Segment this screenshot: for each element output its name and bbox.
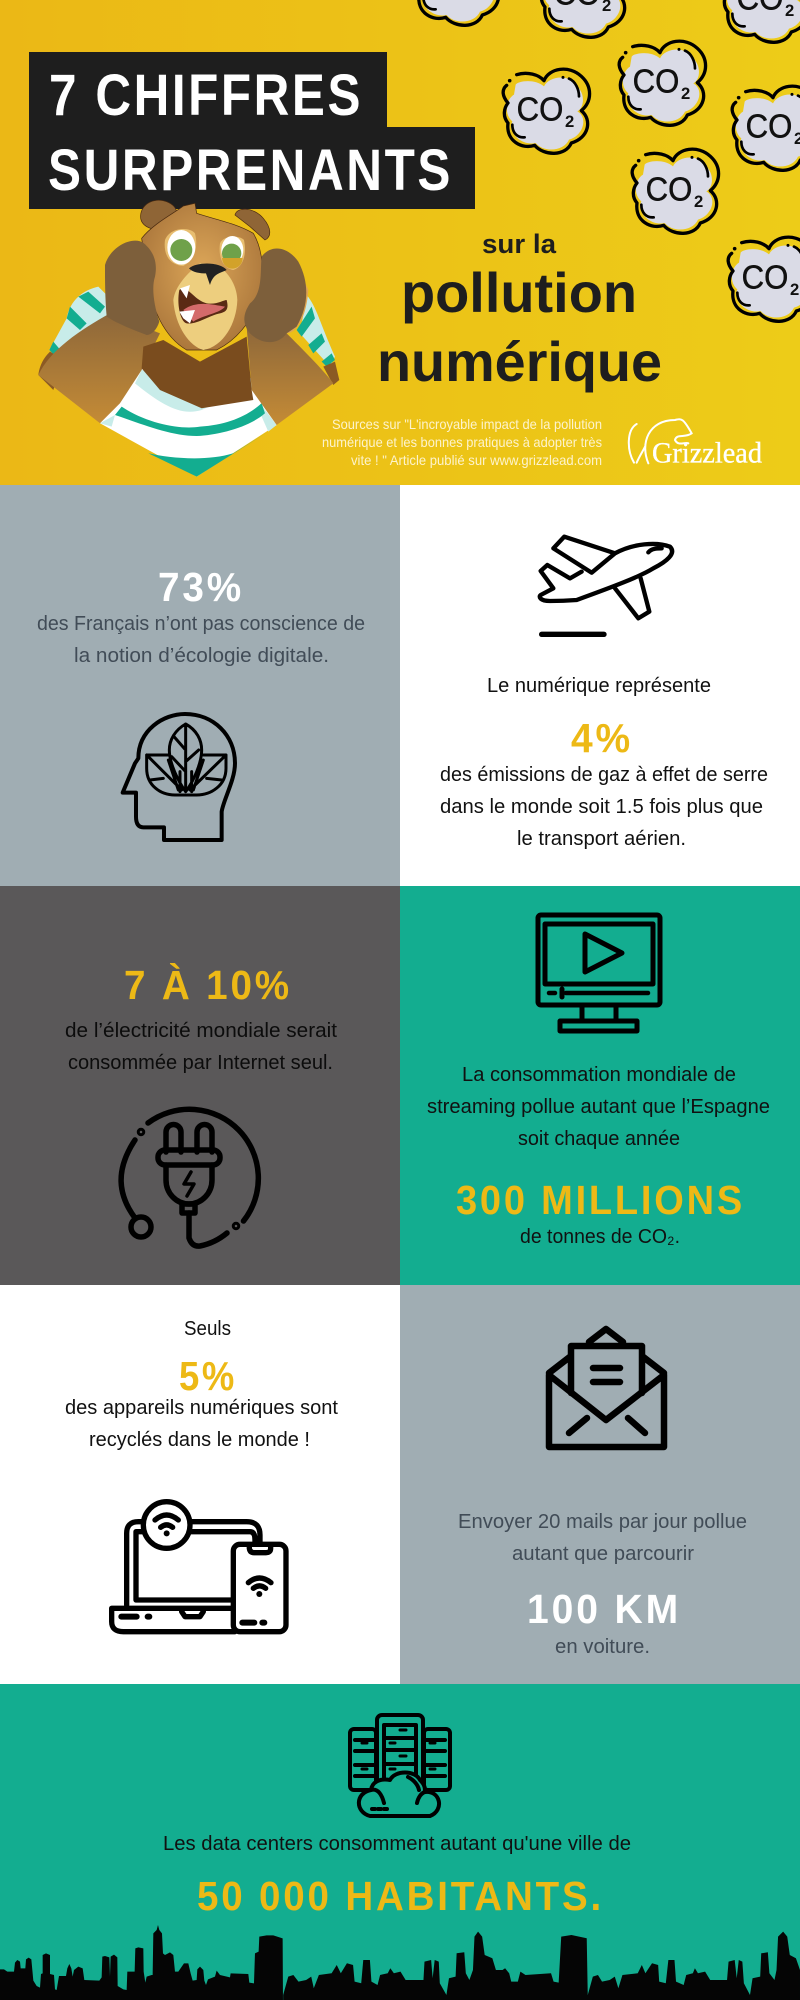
subtitle: numérique (377, 330, 662, 393)
text: devices description (65, 1397, 338, 1451)
stat: 4%: 4% (571, 715, 633, 761)
text: email description: Envoyer 20 mails par jour pollue (458, 1511, 747, 1533)
title box (29, 52, 475, 209)
text: 4% description (440, 764, 768, 850)
panel: data centers (0, 1684, 800, 2000)
icon: CO2 cloud 8: 2 (790, 280, 799, 299)
panel: streaming (400, 886, 800, 1285)
icon: CO2 cloud 4: 2 (565, 112, 574, 131)
panel: 73% (0, 485, 400, 886)
icon: laptop and phone (112, 1502, 286, 1632)
text: 73% description: la notion d’écologie digitale. (74, 645, 329, 667)
icon: servers and cloud (350, 1715, 450, 1816)
title box: 7 CHIFFRES (49, 63, 363, 128)
stat: 300 millions: 300 MILLIONS (456, 1177, 745, 1223)
icon: CO2 cloud 7 (632, 149, 719, 233)
text: 4% description: dans le monde soit 1.5 fois plus que (440, 796, 763, 818)
sources text (322, 416, 602, 468)
icon: CO2 cloud 8: CO (742, 259, 788, 296)
icon: CO2 cloud 8 (728, 237, 800, 321)
stat: 73%: 73% (158, 564, 244, 610)
sources text: vite ! " Article publié sur www.grizzlead.com (351, 452, 602, 468)
icon: CO2 cloud 5 (619, 41, 706, 125)
sources text: numérique et les bonnes pratiques à adopter très (322, 434, 602, 450)
icon: electric plug (121, 1109, 258, 1246)
text: email description (458, 1511, 747, 1565)
skyline silhouette (0, 1925, 800, 2000)
text: 73% description: des Français n’ont pas conscience de (37, 613, 365, 635)
text: streaming description: streaming pollue autant que l’Espagne (427, 1096, 770, 1118)
stat: 100 km: 100 KM (527, 1586, 681, 1632)
icon: CO2 cloud 4 (503, 69, 590, 153)
text: seuls: Seuls (184, 1318, 231, 1340)
subtitle: sur la (482, 229, 557, 259)
icon: CO2 cloud 4: CO (517, 91, 563, 128)
text: intro: Le numérique représente (487, 675, 711, 697)
text: electricity description: consommée par Internet seul. (68, 1052, 333, 1074)
text: electricity description: de l’électricité mondiale serait (65, 1020, 337, 1042)
text: 4% description: le transport aérien. (517, 828, 686, 850)
logo: Grizzlead: Grizzlead (652, 438, 762, 470)
stat: 5%: 5% (179, 1353, 237, 1399)
text: email description: autant que parcourir (512, 1543, 694, 1565)
icon: CO2 cloud 5: CO (633, 63, 679, 100)
stat: 50 000 habitants: 50 000 HABITANTS. (197, 1873, 604, 1919)
subtitle (377, 229, 662, 393)
panel: 5% (0, 1285, 400, 1684)
text: electricity description (65, 1020, 337, 1074)
text: streaming description (427, 1064, 770, 1150)
icon: airplane (540, 537, 672, 634)
icon: CO2 cloud 6: CO (746, 108, 792, 145)
icon: CO2 cloud 1 (414, 0, 501, 25)
panel: emails (400, 1285, 800, 1684)
icon: CO2 cloud 3: 2 (785, 1, 794, 20)
logo: Grizzlead (629, 419, 762, 470)
panel: header (0, 0, 800, 485)
panel: 4% (400, 485, 800, 886)
subtitle: pollution (401, 261, 637, 324)
text: devices description: des appareils numériques sont (65, 1397, 338, 1419)
icon: CO2 cloud 5: 2 (681, 84, 690, 103)
text: data centers description: Les data centers consomment autant qu'une ville de (163, 1833, 631, 1855)
stat: 7 à 10%: 7 À 10% (124, 962, 292, 1008)
text: streaming description: soit chaque année (518, 1128, 680, 1150)
text: tonnes of CO2: de tonnes de CO₂. (520, 1226, 680, 1248)
text: by car: en voiture. (555, 1636, 650, 1658)
icon: CO2 cloud 7: CO (646, 171, 692, 208)
icon: open envelope (549, 1329, 664, 1447)
text: devices description: recyclés dans le monde ! (89, 1429, 310, 1451)
text: 73% description (37, 613, 365, 667)
text: 4% description: des émissions de gaz à effet de serre (440, 764, 768, 786)
panel: 7 à 10% (0, 886, 400, 1285)
icon: CO2 cloud 6 (732, 86, 800, 170)
icon: head with leaves (123, 714, 235, 840)
icon: CO2 cloud 7: 2 (694, 192, 703, 211)
title box: SURPRENANTS (48, 138, 453, 203)
text: streaming description: La consommation mondiale de (462, 1064, 736, 1086)
sources text: Sources sur "L'incroyable impact de la pollution (332, 416, 602, 432)
illustration: frightened bear (38, 200, 339, 477)
icon: CO2 cloud 3 (723, 0, 800, 42)
icon: video monitor (538, 915, 660, 1031)
icon: CO2 cloud 2 (540, 0, 627, 37)
